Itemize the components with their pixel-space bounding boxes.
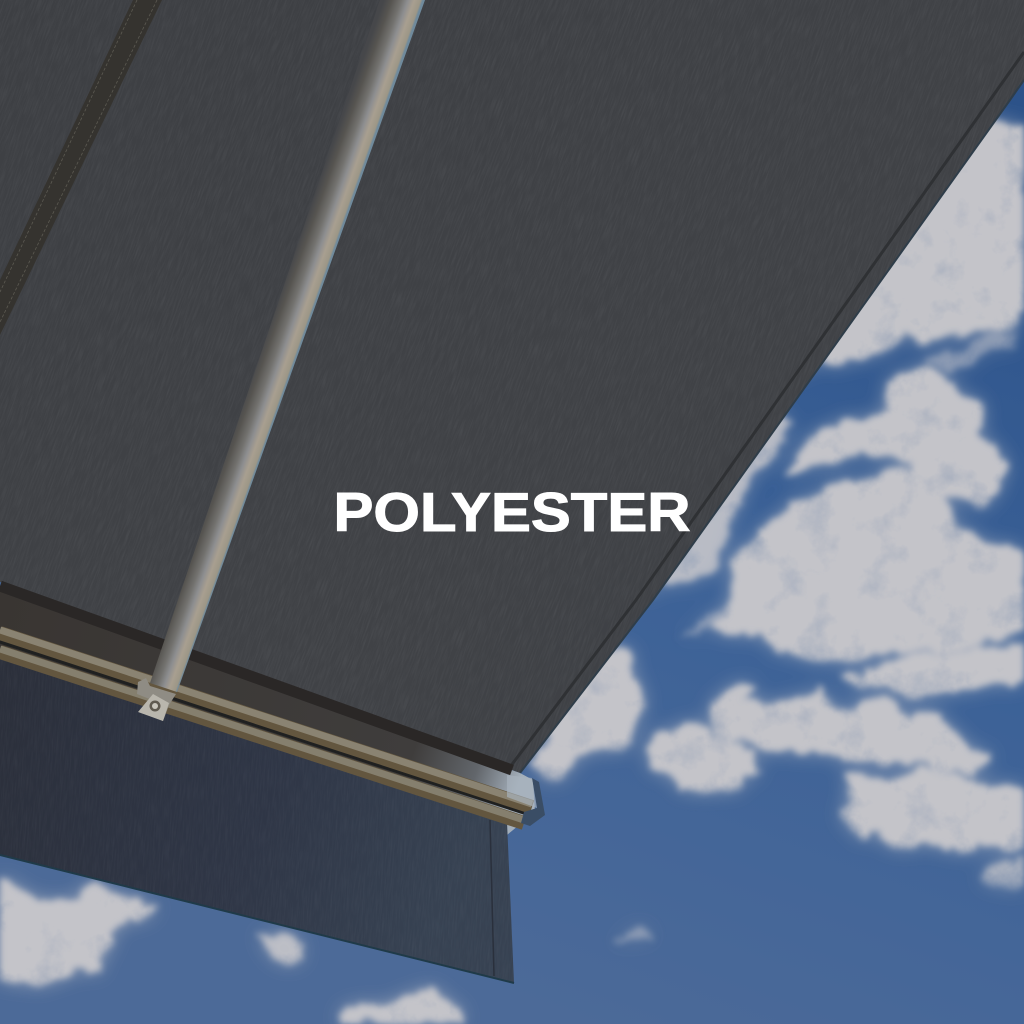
cloud: upper right mass xyxy=(790,120,1024,375)
cloud: right lower strip xyxy=(837,647,1024,693)
awning side seam xyxy=(510,52,1024,773)
cloud: faint wisp xyxy=(610,928,660,942)
title: POLYESTER xyxy=(334,481,690,543)
cloud: lower right mass xyxy=(843,771,1024,850)
strap on fabric xyxy=(0,0,162,335)
cloud: lower band xyxy=(713,685,990,775)
cloud: bottom centre xyxy=(345,992,468,1024)
cloud: bottom left xyxy=(0,880,157,982)
rail end cap xyxy=(507,775,545,826)
cloud: left wisp xyxy=(677,590,757,632)
cloud: right tail xyxy=(980,857,1024,882)
cloud: upper right wisp xyxy=(925,325,1020,375)
front rails xyxy=(0,630,532,823)
cloud: lower small mass xyxy=(647,723,763,790)
cloud: near awning tip xyxy=(530,640,650,772)
strut bracket xyxy=(137,678,176,721)
awning top fabric xyxy=(0,0,1024,773)
support strut xyxy=(150,0,425,692)
cloud: edge strip xyxy=(640,410,795,590)
roller housing band xyxy=(0,590,535,835)
valance drop fabric xyxy=(0,655,514,983)
cloud: middle band xyxy=(780,362,1010,480)
cloud: large central mass xyxy=(715,462,1024,657)
cloud: bottom small xyxy=(248,933,302,962)
fabric shadow line xyxy=(0,586,512,770)
